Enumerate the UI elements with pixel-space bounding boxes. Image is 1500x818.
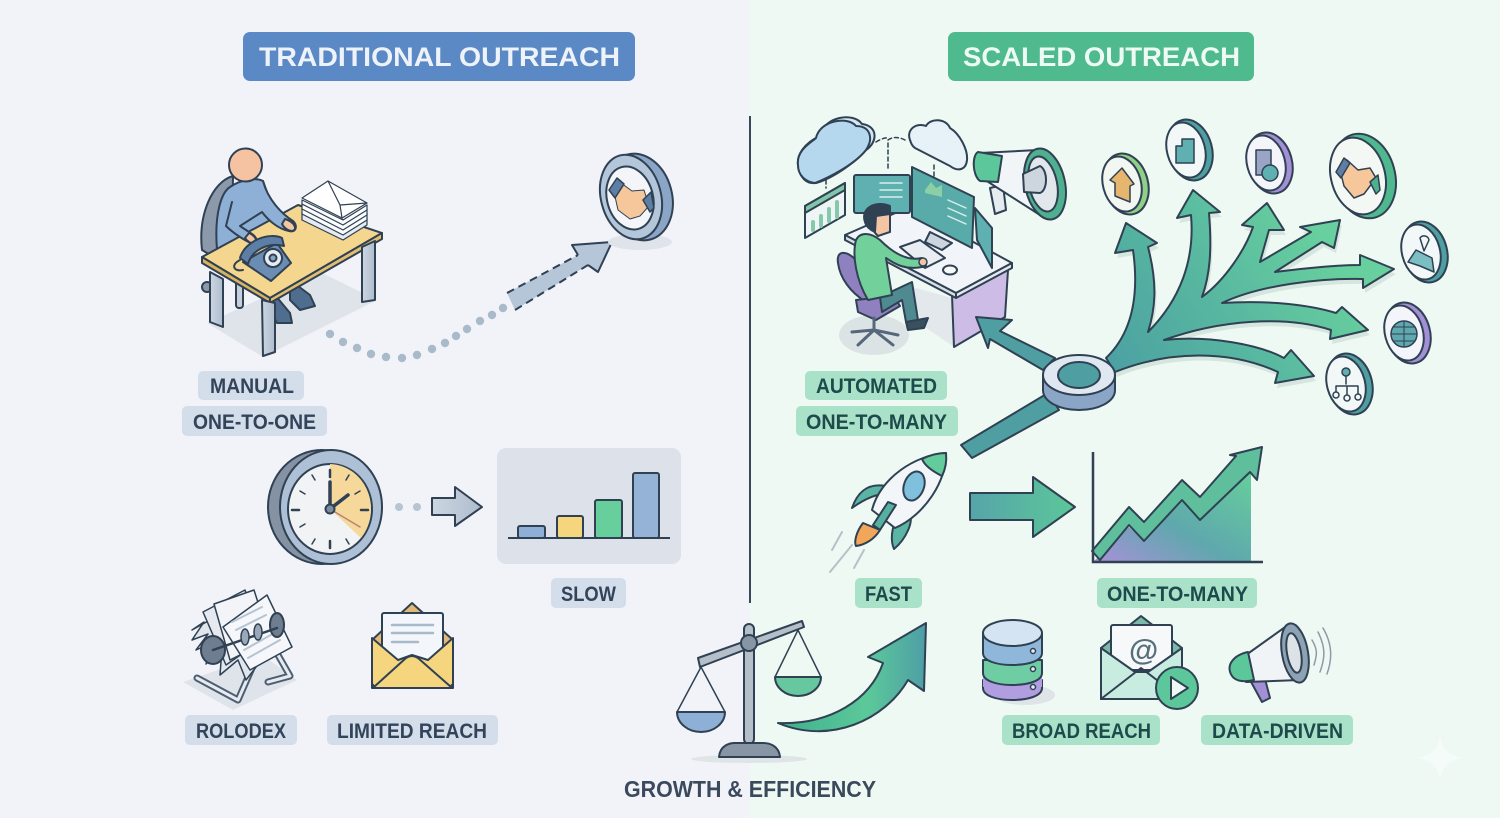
label: LIMITED REACH: LIMITED REACH xyxy=(337,720,487,743)
label: SLOW: SLOW xyxy=(561,583,616,606)
icon: hub ring xyxy=(1043,355,1115,410)
icon: open envelope xyxy=(372,603,453,688)
label: ONE-TO-MANY lower: ONE-TO-MANY xyxy=(1107,583,1248,606)
icon: cloud workstation xyxy=(798,117,1012,355)
icon: org chart medallion xyxy=(1320,348,1379,420)
icon: clock xyxy=(268,450,382,564)
heading: traditional outreach: TRADITIONAL OUTREACH xyxy=(259,42,620,72)
icon: email with play button xyxy=(1101,616,1198,709)
heading: scaled outreach xyxy=(948,32,1254,81)
icon: handshake medallion xyxy=(591,146,682,250)
label: FAST: FAST xyxy=(865,583,912,606)
label: BROAD REACH xyxy=(1002,715,1160,745)
label: ONE-TO-ONE: ONE-TO-ONE xyxy=(193,411,316,434)
label: ROLODEX xyxy=(185,715,297,745)
label: ONE-TO-MANY top: ONE-TO-MANY xyxy=(806,411,947,434)
heading: scaled outreach: SCALED OUTREACH xyxy=(963,42,1240,72)
icon: megaphone with sound waves xyxy=(1230,621,1331,702)
vertical divider xyxy=(749,116,751,603)
icon: map pin medallion xyxy=(1395,216,1454,288)
chart: slow growth bars xyxy=(497,448,681,564)
label: BROAD REACH: BROAD REACH xyxy=(1012,720,1151,743)
label: SLOW xyxy=(551,578,626,608)
label: ROLODEX: ROLODEX xyxy=(196,720,286,743)
left background panel xyxy=(0,0,750,818)
label: AUTOMATED: AUTOMATED xyxy=(816,375,937,398)
icon: rocket xyxy=(830,453,946,572)
arrow: dots to block arrow xyxy=(395,487,482,526)
icon: globe medallion xyxy=(1378,297,1437,369)
icon: person at desk with phone and envelopes xyxy=(201,148,382,357)
icon: house medallion xyxy=(1096,148,1155,220)
icon: rolodex xyxy=(183,590,297,710)
icon: database stack xyxy=(983,620,1055,705)
arrow: dotted path to dashed arrow xyxy=(326,242,612,362)
arrow: growth curve xyxy=(778,623,926,731)
icon: handshake medallion large xyxy=(1322,126,1405,226)
label: MANUAL xyxy=(198,371,304,400)
right background panel xyxy=(750,0,1500,818)
arrow: rocket to chart xyxy=(970,477,1075,537)
connector: stem from hub xyxy=(961,393,1059,458)
label: MANUAL: MANUAL xyxy=(210,375,294,398)
label: DATA-DRIVEN: DATA-DRIVEN xyxy=(1212,720,1343,743)
arrow: hub to desk xyxy=(976,317,1055,370)
label: FAST xyxy=(855,578,922,608)
icon: megaphone top xyxy=(974,145,1072,223)
icon: sparkle watermark xyxy=(1418,736,1462,780)
icon: globe building medallion xyxy=(1240,127,1299,199)
heading: traditional outreach xyxy=(243,32,635,81)
icon: email with play button: @ xyxy=(1129,634,1158,667)
icon: office building medallion xyxy=(1160,114,1219,186)
icon: balance scale xyxy=(677,621,821,763)
chart: growth area with arrow xyxy=(1092,447,1263,562)
caption: growth and efficiency: GROWTH & EFFICIENCY xyxy=(624,776,876,802)
arrow: branching outreach tree xyxy=(1106,190,1396,388)
